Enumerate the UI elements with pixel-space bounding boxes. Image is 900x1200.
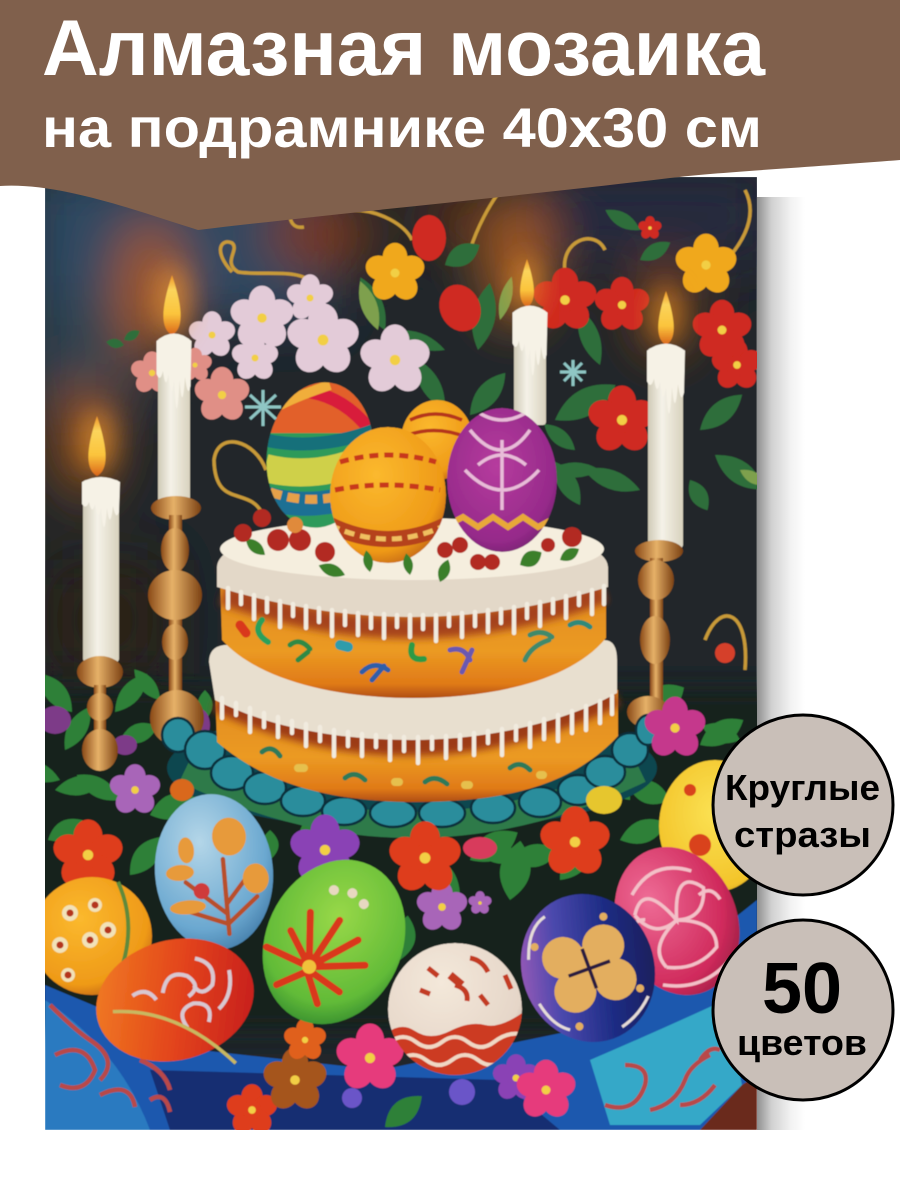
pale flowers <box>186 274 433 397</box>
table cloth <box>45 900 757 1130</box>
green egg <box>262 859 406 1025</box>
purple egg <box>447 408 557 552</box>
painting: Easter cake with eggs and candles <box>45 177 757 1130</box>
cake painted motifs <box>240 620 590 785</box>
small teal star flowers <box>245 360 586 426</box>
blue egg <box>154 793 274 950</box>
striped egg on cake <box>266 381 372 528</box>
large orange egg <box>330 427 446 563</box>
gold curls <box>214 190 750 670</box>
red egg <box>95 938 255 1066</box>
yellow flowers <box>362 234 740 305</box>
yellow egg <box>658 759 750 890</box>
title line 2: на подрамнике 40х30 см <box>42 96 762 159</box>
lower foliage mass <box>0 664 800 1030</box>
badge: 50 colours <box>713 920 893 1100</box>
left orange egg <box>32 877 152 995</box>
lower tier <box>209 640 618 802</box>
candle 4 <box>647 285 685 548</box>
badge: round rhinestones: Круглые <box>725 767 880 808</box>
teal beaded cake plate <box>162 706 660 830</box>
upper foliage <box>105 204 771 519</box>
white egg <box>385 943 530 1080</box>
badge: 50 colours: 50 <box>762 949 842 1029</box>
canvas side shadow <box>757 197 805 1130</box>
painted background glow <box>30 170 770 680</box>
pink egg <box>614 846 740 996</box>
candle 1 <box>79 408 120 662</box>
top banner <box>0 0 900 230</box>
blue purple egg <box>520 893 656 1042</box>
candle 2 <box>154 264 191 505</box>
berries and greens on cake <box>234 509 582 584</box>
cake <box>209 518 618 802</box>
red flowers and tulips <box>412 215 765 456</box>
badge: round rhinestones <box>713 715 893 895</box>
badge: 50 colours: цветов <box>737 1022 867 1063</box>
title line 1: Алмазная мозаика <box>42 3 766 92</box>
upper tier <box>217 518 608 698</box>
small orange egg <box>401 400 473 480</box>
salmon flowers <box>129 348 252 424</box>
lower flowers <box>50 643 735 1137</box>
candle 3 <box>511 255 547 425</box>
gold candle holders <box>77 496 683 771</box>
badge: round rhinestones: стразы <box>734 814 871 855</box>
